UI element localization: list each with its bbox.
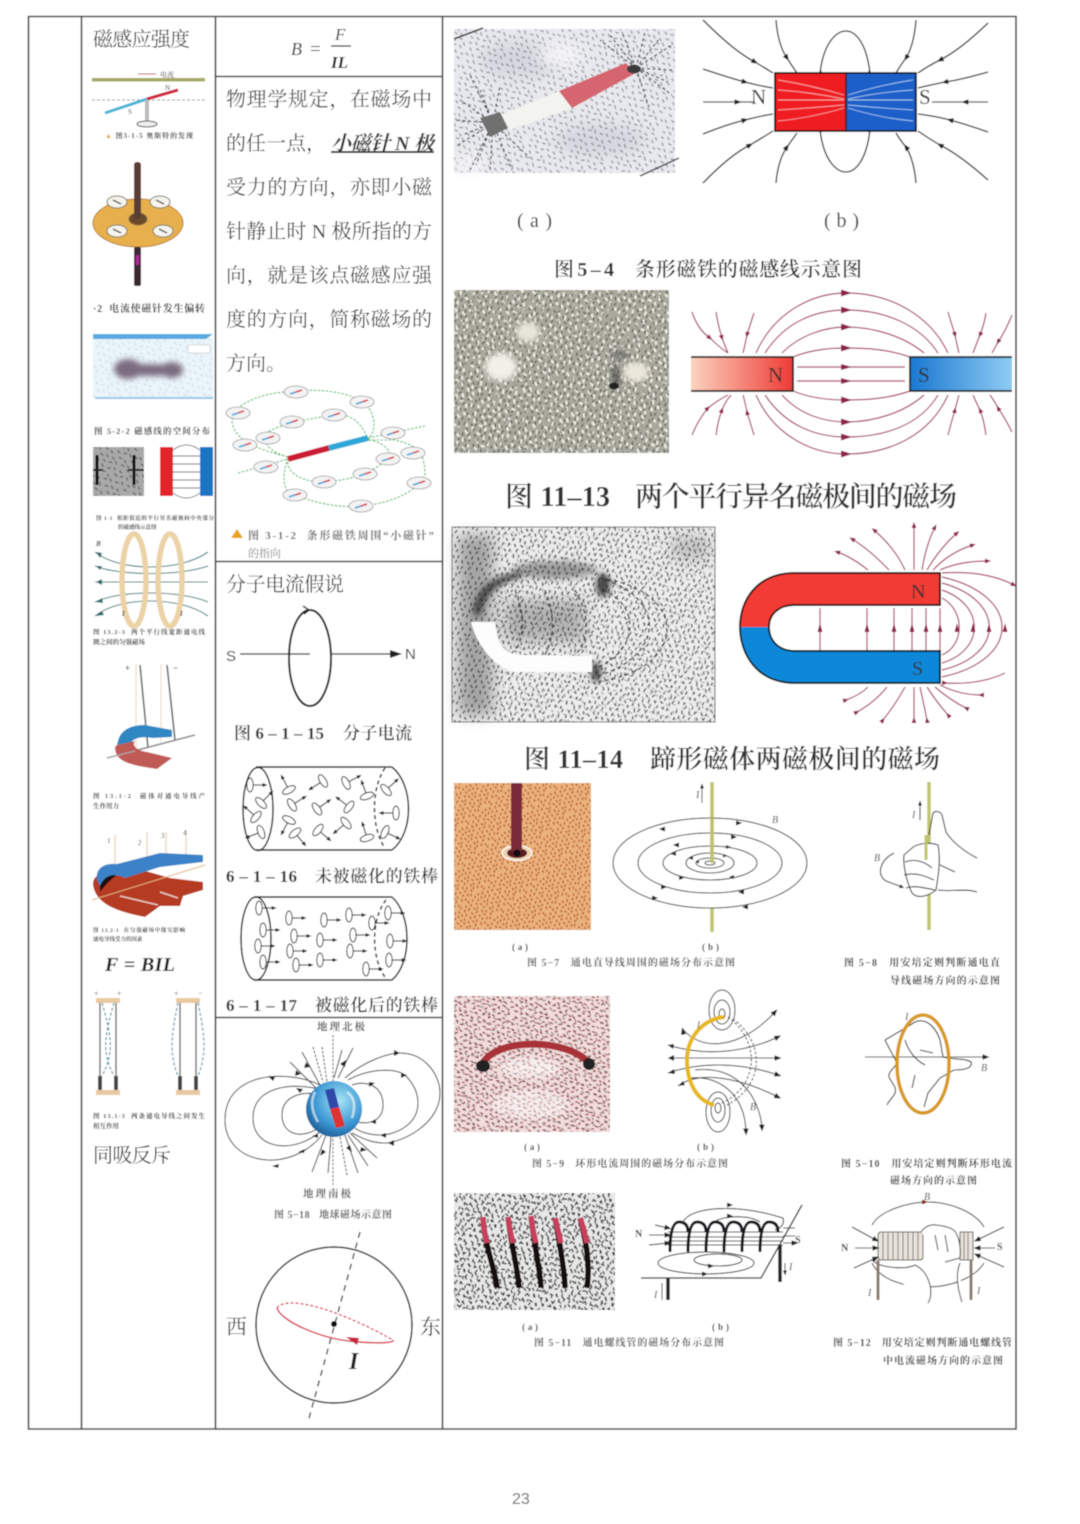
figure: hand on solenoid: N [841, 1243, 849, 1254]
labels: fig 5-9 a b: ( a ) [524, 1142, 540, 1152]
figure: right hand on wire [874, 782, 977, 930]
caption: fig 6-1-16 [226, 866, 438, 886]
caption: bar magnet compasses: 图 3-1-2 条形磁铁周围“小磁针” [248, 528, 434, 542]
figure: right hand on wire: I [911, 810, 916, 821]
figure: hand on solenoid [841, 1192, 1004, 1303]
figure: unlike poles filings [454, 290, 669, 453]
figure: wire swing in horseshoe magnet: + [125, 663, 130, 673]
figure: Oersted experiment: S [128, 108, 132, 116]
figure: Helmholtz coils: I [179, 610, 183, 618]
caption: pole field [96, 514, 214, 531]
caption: fig 11-14: 图 11–14 [524, 745, 623, 774]
caption: fig 5-4: 条形磁铁的磁感线示意图 [635, 257, 862, 281]
figure: unlike poles field lines [691, 290, 1012, 458]
caption: fig 5-8 [844, 956, 1000, 987]
figure: three horseshoe magnets: 3 [161, 832, 165, 840]
labels: fig 5-9 a b [524, 1142, 714, 1152]
figure: magnetized iron rod [241, 897, 407, 980]
caption: coils: 图 13.2-3 两个平行线宽距通电线 [93, 627, 206, 636]
text block: direction definition: 针静止时 N 极所指的方 [226, 220, 432, 243]
caption: spatial distribution: 图 5-2-2 磁感线的空间分布 [94, 426, 210, 436]
caption: fig 5-7: 图 5−7 通电直导线周围的磁场分布示意图 [527, 956, 735, 969]
caption: magnets: 通电导线受力的因素 [93, 935, 143, 943]
caption: coils: 圈之间的匀强磁场 [93, 637, 146, 646]
figure: bar magnet filings [452, 28, 679, 176]
labels: fig 5-9 a b: ( b ) [697, 1142, 714, 1152]
figure: parallel wires: + [174, 989, 179, 998]
figure: ring current filings [454, 996, 610, 1132]
figure: parallel wires: + [94, 989, 99, 998]
caption: fig 5-10: 磁场方向的示意图 [890, 1174, 977, 1187]
caption: fig 5-12: 图 5−12 用安培定则判断通电螺线管 [833, 1336, 1012, 1349]
caption: bar magnet compasses [231, 528, 434, 560]
figure: solenoid field: N [635, 1229, 643, 1240]
labels: fig 5-11 a b [522, 1322, 729, 1332]
caption: fig 5-4: 图 5 – 4 [554, 258, 614, 281]
caption: fig 5-8: 导线磁场方向的示意图 [890, 974, 1000, 987]
figure: ring current field [668, 990, 778, 1132]
figure: earth current loop: 西 [226, 1315, 247, 1339]
figure: right hand on ring: B [981, 1063, 987, 1074]
caption: fig 11-14 [524, 745, 940, 774]
figure: Helmholtz coils [95, 534, 208, 626]
figure: parallel wires: + [117, 989, 122, 998]
labels: fig 5-11 a b: ( b ) [712, 1322, 729, 1332]
figure: solenoid field: S [795, 1235, 801, 1246]
formula: B = F/IL: B [291, 39, 302, 59]
formula: B = F/IL: IL [330, 53, 348, 72]
figure: wire swing in horseshoe magnet [107, 663, 195, 769]
figure: earth current loop [226, 1232, 441, 1422]
text block: direction definition: 的任一点， [226, 132, 326, 155]
caption: fig 5-10 [841, 1157, 1013, 1187]
text block: direction definition [226, 88, 436, 375]
label: geographic north: 地理北极 [317, 1020, 366, 1033]
caption: fig 11-13: 两个平行异名磁极间的磁场 [635, 480, 957, 513]
figure: horseshoe field lines [740, 525, 1014, 720]
figure: right hand on wire: B [874, 853, 880, 864]
figure: unmagnetized iron rod [240, 767, 408, 850]
figure: Helmholtz coils: B [95, 540, 101, 548]
caption: magnets [93, 926, 185, 943]
figure: wire swing in horseshoe magnet: − [173, 663, 178, 673]
formula: F = BIL: F = BIL [104, 954, 175, 976]
caption: fig 5-10: 图 5−10 用安培定则判断环形电流 [841, 1157, 1013, 1170]
caption: wires: 图 13.1-3 两条通电导线之间发生 [93, 1111, 206, 1120]
figure: bar magnet field lines: S [919, 85, 931, 109]
page number: 23 [512, 1491, 530, 1508]
caption: fig 5-12 [833, 1336, 1012, 1367]
figure: hand on solenoid: B [924, 1192, 930, 1203]
figure: solenoid field [635, 1202, 802, 1301]
label: a: ( a ) [517, 210, 552, 232]
caption: fig 5-11: 图 5−11 通电螺线管的磁场分布示意图 [534, 1336, 724, 1349]
text block: direction definition: 向，就是该点磁感应强 [226, 264, 433, 287]
figure: straight wire filings [454, 783, 591, 930]
figure: hand on solenoid: I [976, 1286, 981, 1297]
formula: B = F/IL: = [310, 39, 321, 60]
figure: compasses on disk [93, 162, 183, 286]
figure: bar magnet field lines [703, 20, 988, 183]
figure: horseshoe filings [452, 527, 715, 722]
caption: coils [93, 627, 206, 646]
figure: molecular current [226, 606, 416, 706]
caption: fig 11-14: 蹄形磁体两磁极间的磁场 [650, 745, 940, 774]
figure: compasses around bar magnet [226, 386, 431, 512]
labels: fig 5-7 a b: ( b ) [702, 942, 719, 952]
heading: like attract: 同吸反斥 [93, 1144, 171, 1167]
text block: direction definition: 小磁针 N 极 [331, 132, 436, 155]
panel: definition and molecular current [225, 25, 441, 1422]
caption: fig 11-13 [505, 480, 957, 513]
figure: Helmholtz coils: I [121, 610, 125, 618]
figure: three horseshoe magnets [92, 829, 205, 917]
caption: fig 6-1-15: 分子电流 [343, 724, 412, 743]
figure: hand on solenoid: S [997, 1242, 1003, 1253]
figure: molecular current: N [405, 646, 416, 663]
figure: parallel wires: − [198, 989, 203, 998]
figure: ring current field: I [696, 1020, 701, 1030]
caption: fig 5-18: 图 5−18 地球磁场示意图 [274, 1208, 392, 1221]
figure: hand on solenoid: I [867, 1288, 872, 1299]
figure: horseshoe field lines: N [911, 581, 925, 603]
figure: Oersted experiment: N [165, 84, 170, 92]
label: b: ( b ) [824, 210, 859, 232]
figure: solenoid filings [454, 1193, 615, 1310]
figure: Oersted experiment [92, 70, 205, 127]
caption: fig 6-1-17: 6 – 1 – 17 [226, 996, 298, 1015]
label: geographic south: 地理南极 [303, 1187, 352, 1200]
caption: Oersted: ▲ 图3-1-5 奥斯特的发现 [105, 131, 193, 140]
caption: fig 6-1-17 [226, 995, 438, 1015]
caption: fig 5-12: 中电流磁场方向的示意图 [883, 1354, 1003, 1367]
figure: unlike poles field lines: S [918, 363, 930, 387]
figure: earth magnetic field [225, 1035, 440, 1185]
figure: straight wire field: B [772, 815, 778, 826]
caption: fig 5-8: 图 5−8 用安培定则判断通电直 [844, 956, 1000, 969]
caption: fig 6-1-15 [234, 724, 412, 743]
text block: direction definition: 方向。 [226, 352, 286, 375]
heading: molecular current hypothesis: 分子电流假说 [226, 573, 344, 596]
figure: unlike poles field lines: N [768, 363, 783, 387]
figure: straight wire field [613, 782, 807, 932]
caption: bar magnet compasses: 的指向 [248, 546, 281, 560]
figure: right hand on ring: I [904, 1012, 909, 1023]
formula: B = F/IL [291, 25, 351, 72]
figure: three horseshoe magnets: 1 [107, 837, 111, 845]
caption: pole field: 图 1-1 相距很近的平行异名磁极间中央部分 [96, 514, 214, 522]
caption: fig 11-13: 图 11–13 [505, 481, 610, 513]
figure: filings between poles [93, 447, 144, 496]
caption: needle deflection: ·2 电流使磁针发生偏转 [93, 302, 205, 315]
figure: solenoid field: I [788, 1262, 793, 1273]
caption: fig 5-4 [554, 257, 862, 281]
formula: B = F/IL: F [334, 25, 346, 44]
figure: three horseshoe magnets: 2 [138, 839, 142, 847]
panel: left column figures [92, 28, 214, 1167]
caption: wires: 相互作用 [93, 1121, 119, 1130]
figure: three horseshoe magnets: 4 [183, 829, 187, 837]
labels: fig 5-11 a b: ( a ) [522, 1322, 538, 1332]
caption: fig 6-1-16: 6 – 1 – 16 [226, 867, 297, 886]
figure: parallel wires [94, 989, 204, 1095]
text block: direction definition: 物理学规定，在磁场中 [226, 88, 432, 111]
figure: field between two magnets [160, 445, 213, 498]
figure: earth current loop: I [348, 1349, 360, 1375]
panel: right column field diagrams [452, 20, 1014, 1367]
caption: magnets: 图 13.2-1 在匀强磁场中探究影响 [93, 926, 185, 934]
figure: horseshoe field lines: S [912, 658, 923, 680]
figure: Oersted experiment: 电流 [160, 70, 174, 79]
figure: field in box [93, 334, 213, 398]
figure: solenoid field: I [653, 1290, 658, 1301]
heading: magnetic induction: 磁感应强度 [93, 28, 190, 51]
labels: fig 5-7 a b: ( a ) [512, 942, 528, 952]
text block: direction definition: 受力的方向，亦即小磁 [226, 176, 433, 199]
figure: bar magnet field lines: N [751, 85, 766, 109]
caption: fig 6-1-16: 未被磁化的铁棒 [315, 866, 438, 886]
text block: direction definition: 度的方向，简称磁场的 [226, 308, 432, 331]
caption: fig 5-9: 图 5−9 环形电流周围的磁场分布示意图 [532, 1157, 728, 1170]
labels: fig 5-7 a b [512, 942, 719, 952]
figure: molecular current: S [226, 648, 236, 665]
figure: ring current field: B [750, 1102, 756, 1113]
caption: force [93, 791, 206, 810]
caption: wires [93, 1111, 206, 1130]
figure: right hand on ring [865, 1012, 987, 1113]
caption: force: 图 13.1-2 磁体对通电导线产 [93, 791, 206, 800]
caption: pole field: 的磁感线示意图 [118, 523, 157, 531]
caption: force: 生作用力 [93, 801, 119, 810]
figure: earth current loop: 东 [420, 1315, 441, 1339]
figure: straight wire field: I [695, 790, 700, 801]
caption: fig 6-1-15: 图 6 – 1 – 15 [234, 724, 324, 743]
caption: fig 6-1-17: 被磁化后的铁棒 [315, 995, 438, 1015]
